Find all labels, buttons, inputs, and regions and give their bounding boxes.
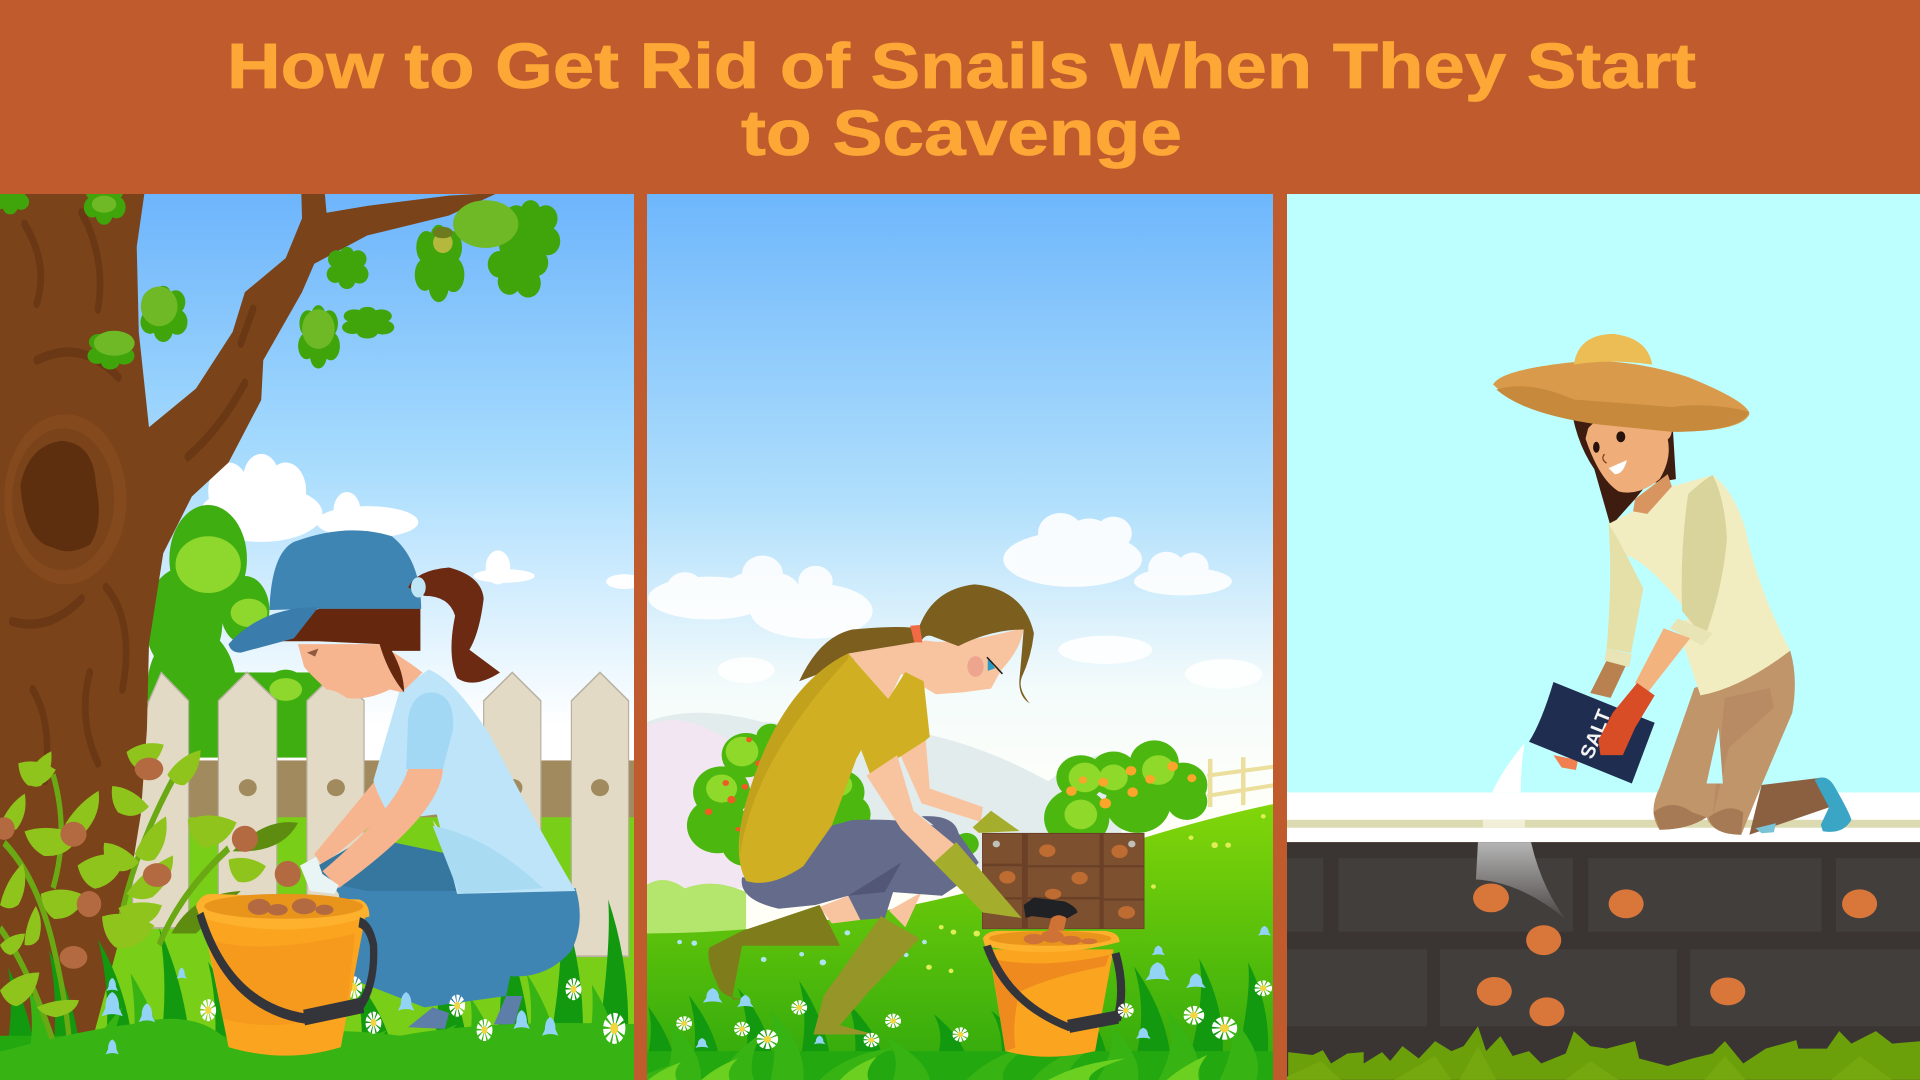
clouds bbox=[648, 513, 1262, 689]
salt bag bbox=[1529, 682, 1655, 783]
distant trees bbox=[145, 505, 327, 758]
front grass bbox=[0, 1019, 641, 1080]
bushes bbox=[687, 724, 1207, 866]
panel: pouring salt on snails bbox=[1280, 166, 1920, 1080]
sky bbox=[647, 194, 1273, 930]
tree trunk and branch bbox=[0, 190, 498, 1080]
woman with ponytail bbox=[708, 584, 1034, 1035]
bucket bbox=[196, 894, 374, 1056]
panel: hand-picking snails under the tree bbox=[0, 175, 649, 1080]
snail-covered plants bbox=[0, 732, 298, 1041]
white ledge bbox=[1280, 792, 1920, 842]
woman with blue cap bbox=[229, 530, 580, 1029]
grass bbox=[632, 959, 1289, 1080]
sky bbox=[136, 194, 634, 760]
fence bbox=[133, 672, 637, 956]
oak leaves bbox=[0, 175, 560, 370]
meadow bbox=[647, 804, 1273, 1052]
header banner bbox=[0, 0, 1920, 194]
snails bbox=[1473, 883, 1877, 1026]
wooden fence bbox=[1207, 757, 1277, 807]
meadow specks bbox=[926, 814, 1266, 973]
hills bbox=[647, 713, 1122, 936]
flowers bbox=[679, 926, 1271, 1048]
title: to Scavenge bbox=[741, 97, 1182, 169]
panel: trapping snails in a wooden board bbox=[632, 189, 1289, 1080]
title: How to Get Rid of Snails When They Start bbox=[227, 30, 1696, 102]
grass behind figure bbox=[0, 900, 628, 1052]
grass strip bbox=[1280, 1026, 1920, 1080]
clouds bbox=[200, 454, 643, 589]
salt label: SALT bbox=[1576, 707, 1616, 762]
red glove bbox=[1598, 683, 1655, 755]
woman with straw hat bbox=[1493, 334, 1851, 835]
gloved hand with trowel bbox=[934, 842, 1078, 936]
lawn behind fence bbox=[95, 817, 634, 1036]
bucket bbox=[983, 930, 1121, 1057]
sky bbox=[1280, 166, 1920, 797]
flowers bbox=[102, 967, 622, 1054]
falling salt bbox=[1476, 743, 1566, 919]
title bbox=[227, 30, 1696, 169]
snail trap board bbox=[982, 833, 1144, 929]
brick wall bbox=[1280, 842, 1920, 1080]
